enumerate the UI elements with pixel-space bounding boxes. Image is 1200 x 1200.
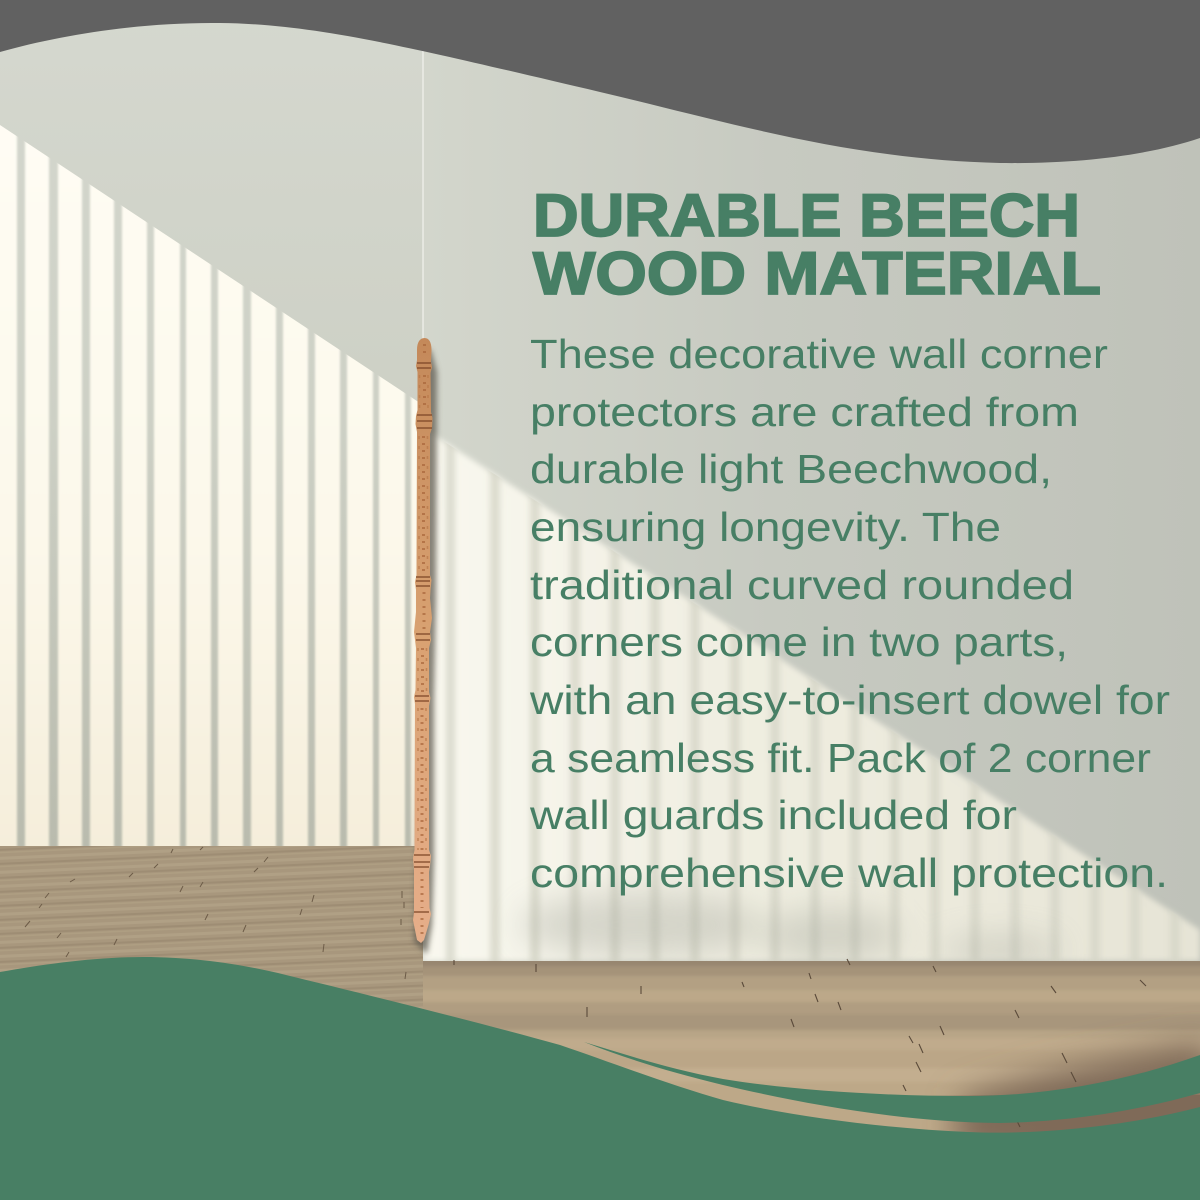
body paragraph: protectors are crafted from	[530, 389, 1079, 435]
turned wooden post	[413, 338, 432, 943]
body paragraph: wall guards included for	[529, 792, 1017, 838]
body paragraph	[529, 331, 1170, 896]
body paragraph: durable light Beechwood,	[530, 446, 1052, 492]
floor: right plank section	[423, 961, 1200, 1133]
body paragraph: corners come in two parts,	[530, 619, 1068, 665]
right wall light stripes	[423, 420, 1200, 980]
body paragraph: with an easy-to-insert dowel for	[529, 677, 1170, 723]
heading line 1: DURABLE BEECH	[533, 182, 1080, 249]
post carved texture	[422, 344, 424, 934]
post speckled side grain	[418, 375, 428, 850]
green swoosh	[584, 1042, 1200, 1123]
left wall background	[0, 0, 423, 846]
heading	[533, 182, 1101, 307]
body paragraph: a seamless fit. Pack of 2 corner	[530, 735, 1151, 781]
right wall background	[423, 0, 1200, 961]
main green wave	[0, 957, 1200, 1200]
body paragraph: These decorative wall corner	[530, 331, 1108, 377]
grey top wave	[0, 0, 1200, 163]
body paragraph: ensuring longevity. The	[530, 504, 1001, 550]
post turned rings	[414, 363, 432, 912]
floor: left plank section	[0, 846, 423, 1009]
left wall light stripes	[0, 100, 425, 850]
wall corner hanging line	[422, 50, 424, 340]
heading line 2: WOOD MATERIAL	[533, 240, 1101, 307]
body paragraph: comprehensive wall protection.	[530, 850, 1168, 896]
green bottom wave with swoosh	[0, 957, 1200, 1200]
wooden floor	[0, 846, 1200, 1133]
floor: plank joints	[25, 847, 406, 979]
decorative wall corner protector	[413, 338, 437, 954]
body paragraph: traditional curved rounded	[530, 562, 1074, 608]
protector drop shadow	[414, 350, 437, 954]
